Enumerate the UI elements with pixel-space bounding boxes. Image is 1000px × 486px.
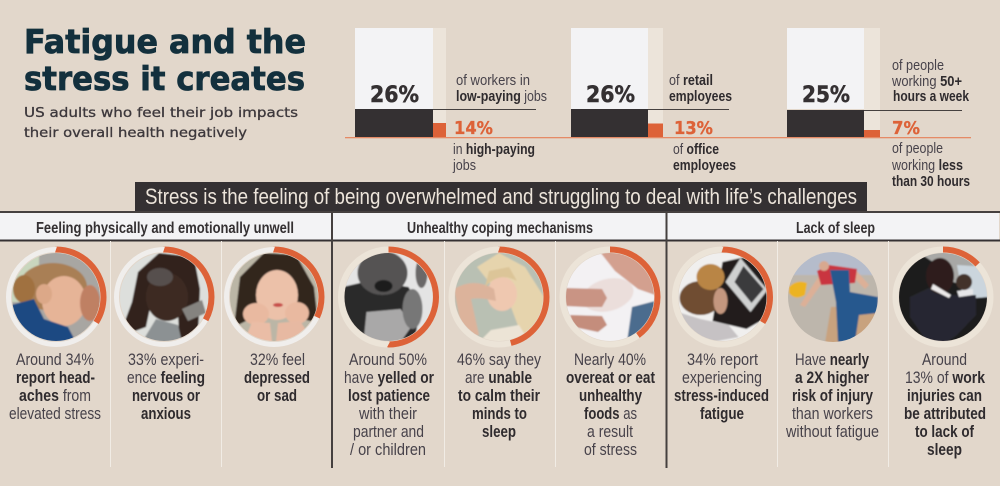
text: nervous: ence feeling bbox=[127, 368, 205, 387]
text: fatigue: fatigue bbox=[700, 404, 744, 423]
text: work injuries bbox=[904, 350, 986, 459]
heading: lack of sleep: Lack of sleep bbox=[796, 220, 875, 237]
text: yelled: with their bbox=[358, 404, 417, 423]
label: office: of office bbox=[673, 141, 719, 158]
text: fatigue: experiencing bbox=[682, 368, 762, 387]
text: yelled: Around 50% bbox=[349, 350, 427, 369]
label: low-paying bbox=[456, 72, 547, 105]
text: overeat: of stress bbox=[584, 440, 637, 459]
text: work injuries: 13% of work bbox=[905, 368, 985, 387]
label: high-paying: in high-paying bbox=[453, 141, 535, 158]
label: less than 30 hours: of people bbox=[892, 140, 943, 157]
value: 7%: 7% bbox=[892, 118, 920, 139]
subtitle: US adults who feel their job impacts bbox=[24, 105, 298, 121]
text: work injuries: to lack of bbox=[915, 422, 974, 441]
text: unable to calm: 46% say they bbox=[457, 350, 541, 369]
value: 13%: 13% bbox=[674, 118, 713, 139]
text: depressed bbox=[244, 350, 310, 405]
text: unable to calm: minds to bbox=[472, 404, 527, 423]
value: 25%: 25% bbox=[802, 83, 850, 108]
panel: lack of sleep bbox=[674, 250, 990, 459]
photo ring: woman with headache 34 percent bbox=[8, 250, 104, 344]
photo ring: young woman sad 32 percent bbox=[226, 250, 322, 344]
text: nervous bbox=[127, 350, 205, 423]
text: injury risk bbox=[785, 350, 879, 441]
stat: retail vs office bbox=[571, 28, 736, 174]
text: headaches: report head- bbox=[16, 368, 95, 387]
text: depressed: or sad bbox=[257, 386, 297, 405]
label: less than 30 hours: than 30 hours bbox=[892, 173, 970, 190]
label: less than 30 hours: working less bbox=[891, 157, 963, 174]
text: yelled: partner and bbox=[353, 422, 424, 441]
photo ring: overeating 40 percent bbox=[562, 250, 658, 344]
photo ring: woman at laptop 34 percent bbox=[675, 250, 770, 344]
text: overeat: unhealthy bbox=[579, 386, 642, 405]
text: overeat: foods as bbox=[584, 404, 637, 423]
label: 50+ hours: of people bbox=[892, 57, 944, 74]
text: yelled: lost patience bbox=[348, 386, 430, 405]
label: high-paying: jobs bbox=[452, 157, 476, 174]
text: yelled: have yelled or bbox=[344, 368, 434, 387]
label: 50+ hours: working 50+ bbox=[891, 73, 962, 90]
label: retail: of retail bbox=[669, 72, 713, 89]
bar: 26 percent bbox=[355, 109, 433, 137]
value: 14%: 14% bbox=[454, 118, 493, 139]
label: low-paying: low-paying jobs bbox=[456, 88, 547, 105]
text: work injuries: sleep bbox=[927, 440, 962, 459]
text: depressed: 32% feel bbox=[250, 350, 305, 369]
bar: 7 percent bbox=[864, 130, 880, 137]
photo ring: driver yawning 13 percent bbox=[896, 250, 990, 344]
panel: coping mechanisms bbox=[341, 250, 658, 459]
label: office: employees bbox=[673, 157, 736, 174]
text: unable to calm: are unable bbox=[465, 368, 532, 387]
photo: injured worker on floor bbox=[787, 251, 879, 343]
text: injury risk: Have nearly bbox=[795, 350, 869, 369]
value: 26%: 26% bbox=[370, 83, 419, 108]
label: less than 30 hours bbox=[891, 140, 970, 190]
label: high-paying bbox=[452, 141, 535, 174]
title: Fatigue and the bbox=[24, 22, 306, 61]
text: fatigue: stress-induced bbox=[674, 386, 769, 405]
subtitle bbox=[24, 105, 298, 141]
text: injury risk: a 2X higher bbox=[795, 368, 869, 387]
text: overeat: overeat or eat bbox=[566, 368, 655, 387]
text: work injuries: injuries can bbox=[907, 386, 982, 405]
label: retail bbox=[669, 72, 732, 105]
bar: 14 percent bbox=[433, 123, 446, 137]
banner: Stress is the feeling of being overwhelmed and struggling to deal with life’s challenges bbox=[145, 184, 857, 209]
text: unable to calm bbox=[457, 350, 541, 441]
text: headaches bbox=[9, 350, 101, 423]
text: depressed: depressed bbox=[244, 368, 310, 387]
subtitle: their overall health negatively bbox=[24, 125, 247, 141]
label: low-paying: of workers in bbox=[456, 72, 530, 89]
title bbox=[24, 22, 306, 98]
heading: coping mechanisms: Unhealthy coping mechanisms bbox=[407, 220, 593, 237]
label: retail: employees bbox=[669, 88, 732, 105]
photo ring: blonde woman resting 46 percent bbox=[452, 250, 546, 344]
text: headaches: elevated stress bbox=[9, 404, 101, 423]
text: unable to calm: to calm their bbox=[458, 386, 540, 405]
text: work injuries: Around bbox=[922, 350, 967, 369]
label: 50+ hours bbox=[891, 57, 970, 105]
stat baseline bbox=[345, 137, 971, 138]
text: overeat: Nearly 40% bbox=[574, 350, 646, 369]
photo ring: man holding head 33 percent bbox=[116, 250, 212, 344]
section header band bbox=[0, 211, 1000, 242]
stat: low vs high paying jobs bbox=[355, 28, 547, 174]
bar: 26 percent retail bbox=[571, 109, 648, 137]
text: injury risk: without fatigue bbox=[785, 422, 879, 441]
text: unable to calm: sleep bbox=[482, 422, 516, 441]
label: office bbox=[673, 141, 736, 174]
text: yelled bbox=[344, 350, 434, 459]
panel: feeling unwell bbox=[8, 250, 322, 423]
text: fatigue: 34% report bbox=[687, 350, 758, 369]
heading: physically unwell: Feeling physically and emotionally unwell bbox=[36, 220, 294, 237]
text: nervous: 33% experi- bbox=[128, 350, 204, 369]
text: fatigue bbox=[674, 350, 769, 423]
value: 26% retail: 26% bbox=[586, 83, 635, 108]
text: headaches: Around 34% bbox=[16, 350, 94, 369]
photo ring: yelling woman 50 percent bbox=[341, 250, 436, 344]
label: 50+ hours: hours a week bbox=[893, 88, 970, 105]
bar: 25 percent bbox=[787, 110, 864, 137]
text: injury risk: than workers bbox=[792, 404, 873, 423]
stat: long vs short hours bbox=[787, 28, 970, 190]
text: overeat bbox=[566, 350, 655, 459]
text: yelled: / or children bbox=[350, 440, 426, 459]
title: stress it creates bbox=[24, 59, 305, 98]
text: nervous: nervous or bbox=[132, 386, 200, 405]
text: headaches: aches from bbox=[19, 386, 91, 405]
text: overeat: a result bbox=[587, 422, 633, 441]
text: nervous: anxious bbox=[141, 404, 191, 423]
text: injury risk: risk of injury bbox=[792, 386, 873, 405]
bar: 13 percent office bbox=[648, 124, 663, 137]
